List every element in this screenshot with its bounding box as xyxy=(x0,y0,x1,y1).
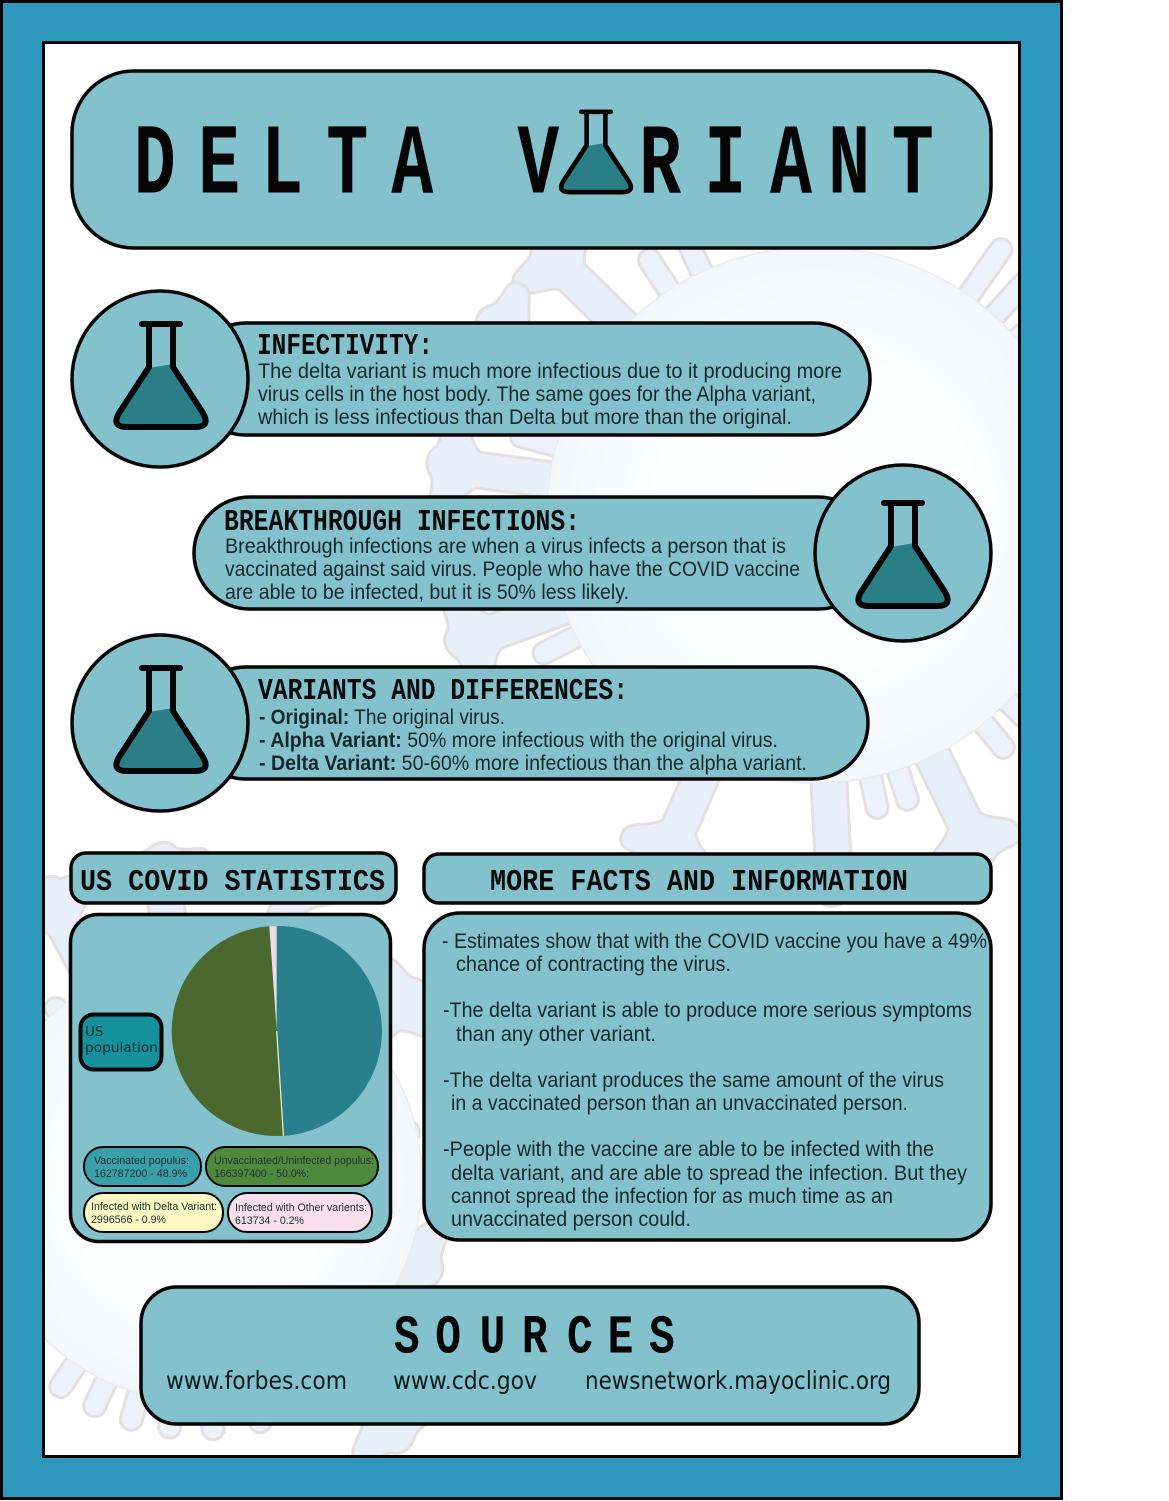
title banner xyxy=(72,71,991,248)
text: fact 1 xyxy=(442,930,987,976)
text: variants body: - Alpha Variant: 50% more infectious with the original virus. xyxy=(259,729,778,752)
legend: vaccinated xyxy=(84,1147,201,1186)
text: fact 2: than any other variant. xyxy=(456,1023,656,1046)
heading: infectivity: INFECTIVITY: xyxy=(257,329,433,364)
text: variants body: - Original: The original virus. xyxy=(259,706,505,729)
text: source 3: newsnetwork.mayoclinic.org xyxy=(585,1366,891,1395)
heading: US COVID statistics xyxy=(71,853,396,903)
heading: US COVID statistics: US COVID STATISTICS xyxy=(80,865,385,900)
text: variants body xyxy=(259,706,807,775)
legend: delta infected: Infected with Delta Variant: xyxy=(91,1201,217,1213)
legend: unvaccinated: 166397400 - 50.0%: xyxy=(214,1168,309,1180)
text: fact 1: - Estimates show that with the COVID vaccine you have a 49% xyxy=(442,930,987,953)
title text: RIANT: RIANT xyxy=(639,109,934,223)
legend: other variants: 613734 - 0.2% xyxy=(235,1215,304,1227)
heading: variants and differences: VARIANTS AND DIFFERENCES: xyxy=(258,674,628,709)
text: source 1: www.forbes.com xyxy=(166,1366,347,1395)
background: virus illustrations xyxy=(0,205,1089,1479)
legend: unvaccinated xyxy=(206,1147,378,1186)
legend: other variants: Infected with Other varients: xyxy=(235,1202,367,1214)
text: breakthrough body xyxy=(225,535,800,604)
text: fact 3: in a vaccinated person than an unvaccinated person. xyxy=(451,1092,908,1115)
text: fact 3: -The delta variant produces the same amount of the virus xyxy=(443,1069,944,1092)
pie chart: US population xyxy=(172,926,382,1136)
panel: US statistics xyxy=(70,914,390,1242)
heading: breakthrough infections: BREAKTHROUGH INFECTIONS: xyxy=(224,505,580,540)
text: infectivity body: virus cells in the host body. The same goes for the Alpha variant, xyxy=(258,383,816,406)
text: fact 1: chance of contracting the virus. xyxy=(456,953,731,976)
legend: delta infected: 2996566 - 0.9% xyxy=(91,1214,166,1226)
icon: title flask xyxy=(561,112,631,192)
label: US population xyxy=(80,1014,162,1070)
text: breakthrough body: Breakthrough infections are when a virus infects a person that is xyxy=(225,535,786,558)
label: US population: population xyxy=(85,1040,158,1056)
text: infectivity body: which is less infectious than Delta but more than the original. xyxy=(257,406,792,429)
panel: infectivity xyxy=(72,291,870,467)
heading: sources: SOURCES xyxy=(394,1307,675,1369)
text: infectivity body xyxy=(257,360,842,429)
panel: more facts xyxy=(424,913,991,1240)
text: fact 4: unvaccinated person could. xyxy=(451,1208,691,1231)
text: variants body: - Delta Variant: 50-60% more infectious than the alpha variant. xyxy=(259,752,807,775)
panel: variants and differences xyxy=(72,635,868,811)
legend: vaccinated: Vaccinated populus: xyxy=(94,1155,189,1167)
text: breakthrough body: vaccinated against said virus. People who have the COVID vaccine xyxy=(225,558,800,581)
text: fact 2: -The delta variant is able to produce more serious symptoms xyxy=(443,999,972,1022)
text: source 2: www.cdc.gov xyxy=(393,1366,537,1395)
icon: infectivity flask badge xyxy=(72,291,248,467)
legend: delta infected xyxy=(84,1193,223,1232)
label: US population: US xyxy=(85,1024,103,1040)
legend: vaccinated: 162787200 - 48.9% xyxy=(94,1168,187,1180)
text: fact 4: -People with the vaccine are able to be infected with the xyxy=(443,1138,934,1161)
text: fact 4: cannot spread the infection for as much time as an xyxy=(451,1185,893,1208)
heading: more facts and information: MORE FACTS AND INFORMATION xyxy=(490,865,908,900)
text: fact 3 xyxy=(443,1069,944,1115)
text: fact 4 xyxy=(443,1138,967,1231)
icon: variants flask badge xyxy=(72,635,248,811)
text: breakthrough body: are able to be infected, but it is 50% less likely. xyxy=(225,581,629,604)
title text: DELTA: DELTA xyxy=(134,109,433,223)
legend: other variants xyxy=(228,1193,372,1232)
panel: sources xyxy=(141,1287,919,1424)
inner white page xyxy=(44,42,1020,1456)
title letter V: V xyxy=(517,109,559,223)
panel: breakthrough infections xyxy=(194,465,991,641)
text: fact 4: delta variant, and are able to spread the infection. But they xyxy=(451,1162,967,1185)
legend: unvaccinated: Unvaccinated/Uninfected populus: xyxy=(214,1155,374,1167)
heading: more facts and information xyxy=(424,854,991,903)
text: infectivity body: The delta variant is much more infectious due to it producing more xyxy=(258,360,842,383)
icon: breakthrough flask badge xyxy=(815,465,991,641)
text: fact 2 xyxy=(443,999,972,1046)
